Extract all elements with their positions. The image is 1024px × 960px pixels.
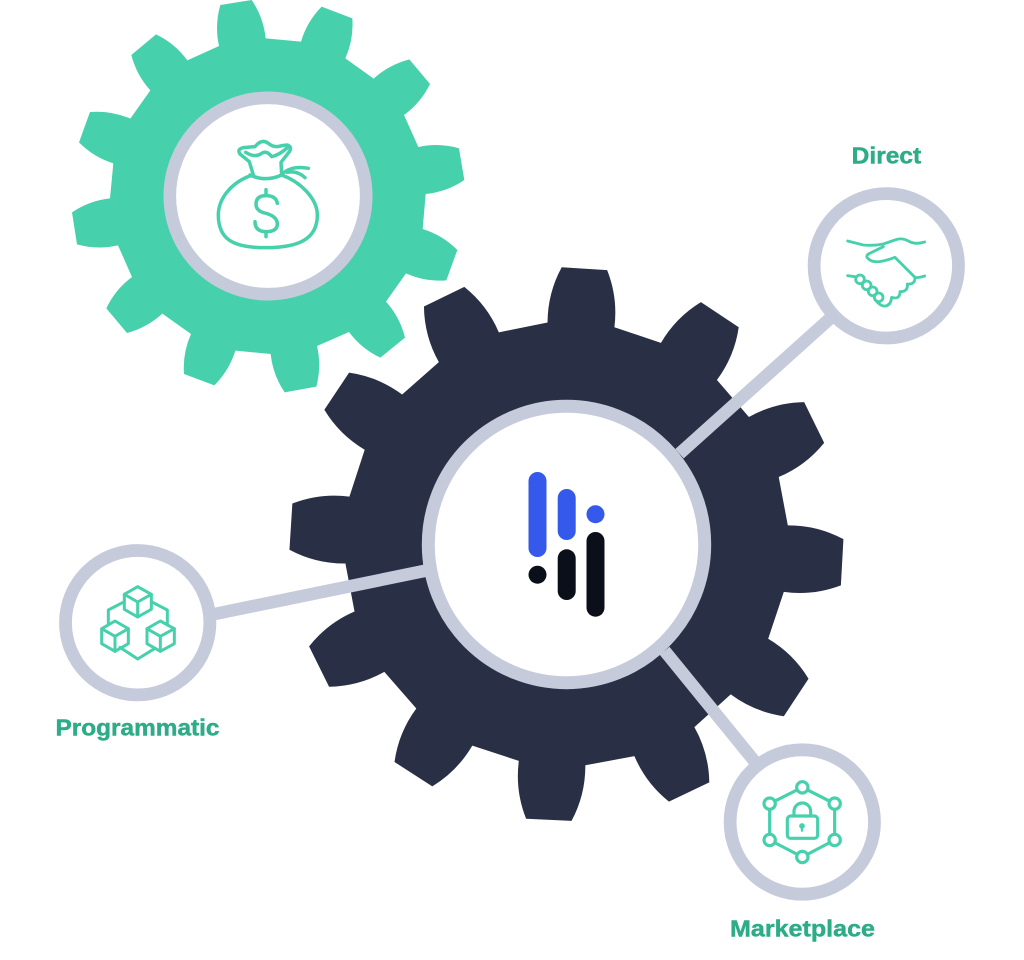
logo blue bars <box>528 472 604 557</box>
logo <box>528 472 604 617</box>
dark gear hub ring <box>428 406 705 683</box>
icon: network lock <box>764 782 840 863</box>
programmatic ring <box>66 550 210 695</box>
label: direct: Direct <box>852 142 922 168</box>
node: programmatic <box>66 550 210 695</box>
green gear with money bag <box>72 0 464 392</box>
node: marketplace <box>730 750 874 894</box>
label: marketplace: Marketplace <box>730 916 875 942</box>
connector: marketplace <box>665 651 760 768</box>
dark gear with logo <box>205 267 843 821</box>
green gear hub ring <box>170 98 366 294</box>
green gear shape <box>72 0 464 392</box>
direct ring <box>814 194 958 338</box>
logo black bars <box>528 532 604 617</box>
connector over gear: direct <box>680 314 835 454</box>
node: direct <box>814 194 958 338</box>
connector: direct <box>680 314 835 454</box>
icon: handshake <box>848 239 925 306</box>
connector: programmatic <box>205 570 428 616</box>
icon: money bag <box>218 141 317 248</box>
icon: blocks <box>102 587 174 659</box>
dark gear shape <box>289 267 843 821</box>
marketplace ring <box>730 750 874 894</box>
label: programmatic: Programmatic <box>56 714 220 740</box>
